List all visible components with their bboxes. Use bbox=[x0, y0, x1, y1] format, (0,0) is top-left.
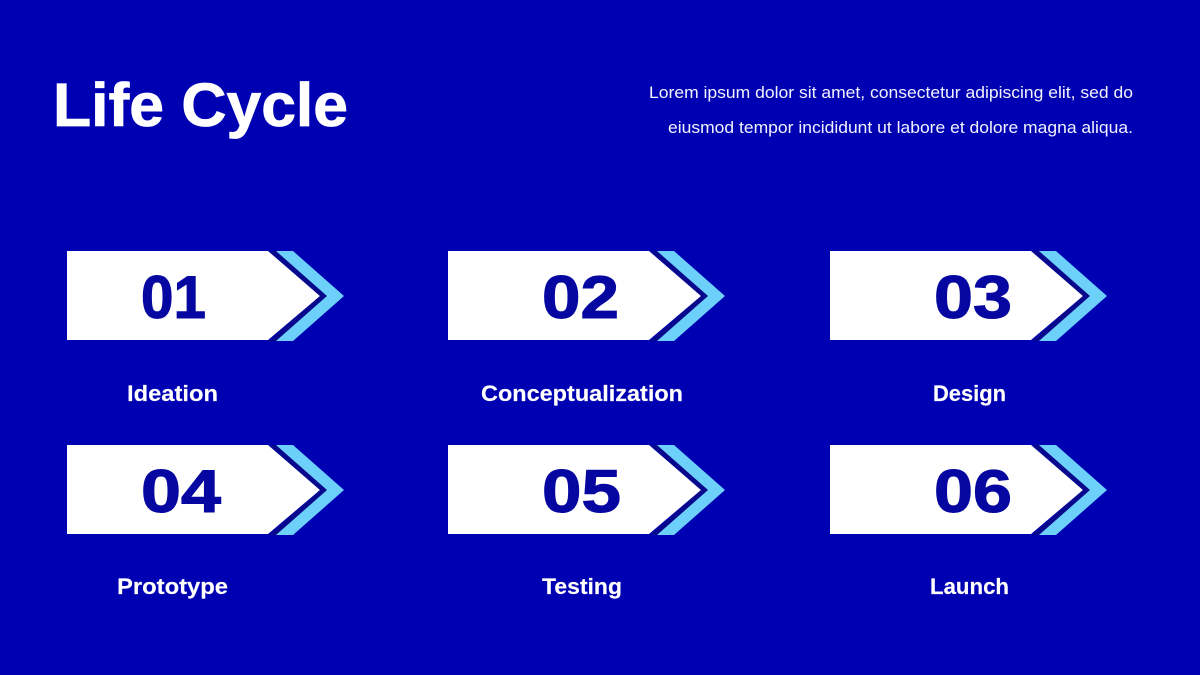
number 02: 02 bbox=[542, 264, 619, 331]
step 05: Testing bbox=[448, 445, 725, 599]
step 01: Ideation bbox=[67, 251, 344, 406]
arrow 01 bbox=[67, 251, 344, 341]
arrow 02 bbox=[448, 251, 725, 341]
label Conceptualization: Conceptualization bbox=[481, 381, 683, 406]
number 05: 05 bbox=[542, 458, 621, 525]
label Design: Design bbox=[933, 381, 1006, 406]
number 03: 03 bbox=[934, 264, 1012, 331]
step 06: Launch bbox=[830, 445, 1107, 599]
label Prototype: Prototype bbox=[117, 574, 228, 599]
arrow 04 bbox=[67, 445, 344, 535]
step 02: Conceptualization bbox=[448, 251, 725, 406]
number 01: 01 bbox=[141, 264, 206, 331]
description text: Lorem ipsum dolor sit amet, consectetur adipiscing elit, sed do bbox=[649, 84, 1133, 102]
label Ideation: Ideation bbox=[127, 381, 218, 406]
label Testing: Testing bbox=[542, 574, 622, 599]
step 03: Design bbox=[830, 251, 1107, 406]
arrow 06 bbox=[830, 445, 1107, 535]
description text bbox=[649, 84, 1133, 137]
number 06: 06 bbox=[934, 458, 1012, 525]
description text: eiusmod tempor incididunt ut labore et dolore magna aliqua. bbox=[668, 119, 1133, 137]
arrow 05 bbox=[448, 445, 725, 535]
arrow 03 bbox=[830, 251, 1107, 341]
step 04: Prototype bbox=[67, 445, 344, 599]
title: Life Cycle bbox=[53, 71, 348, 139]
label Launch: Launch bbox=[930, 574, 1009, 599]
number 04: 04 bbox=[141, 458, 222, 525]
